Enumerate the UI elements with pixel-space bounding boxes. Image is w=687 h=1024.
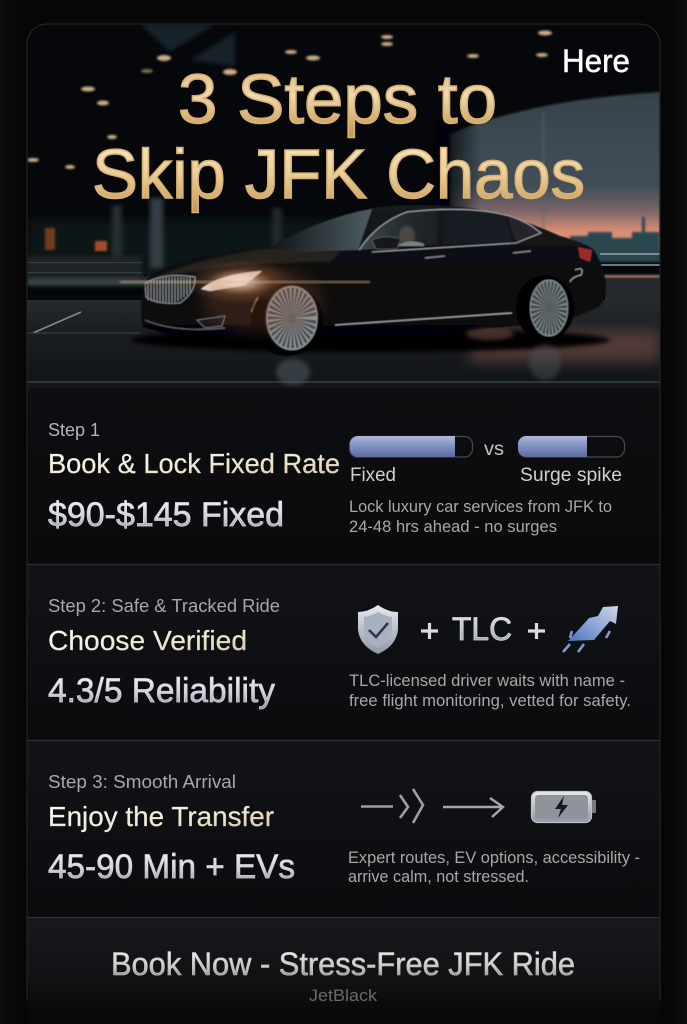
luxury black sedan bbox=[130, 205, 610, 356]
wheel: rear bbox=[516, 275, 574, 341]
icon: shield with check bbox=[358, 605, 398, 654]
bar comparison: fixed vs surge: Fixed bbox=[350, 465, 396, 486]
call to action text: Book Now - Stress-Free JFK Ride bbox=[111, 946, 575, 982]
step 2 description: TLC-licensed driver waits with name - bbox=[349, 671, 625, 690]
bar comparison: fixed vs surge: Surge spike bbox=[520, 465, 622, 486]
bar comparison: fixed vs surge bbox=[350, 436, 624, 486]
title bbox=[92, 60, 585, 213]
step 1 heading: Book & Lock Fixed Rate bbox=[48, 448, 340, 479]
panel: hero photo bbox=[27, 24, 660, 388]
panel: step 1 bbox=[28, 388, 660, 564]
step 1 description: 24-48 hrs ahead - no surges bbox=[349, 517, 557, 536]
panel: step 2 bbox=[28, 565, 660, 740]
step 1 description bbox=[349, 497, 612, 536]
headlight flare bbox=[120, 260, 370, 334]
step 3 description bbox=[348, 848, 640, 886]
step 2 rating: 4.3/5 Reliability bbox=[48, 672, 275, 710]
section dividers bbox=[27, 564, 660, 918]
step 2 description: free flight monitoring, vetted for safety. bbox=[349, 691, 631, 710]
step 3 time: 45-90 Min + EVs bbox=[48, 848, 295, 886]
step 1 price: $90-$145 Fixed bbox=[48, 496, 284, 534]
step 3 description: Expert routes, EV options, accessibility - bbox=[348, 848, 640, 867]
step 3 heading: Enjoy the Transfer bbox=[48, 801, 274, 832]
label: Here: Here bbox=[562, 43, 630, 79]
title: 3 Steps to bbox=[178, 60, 497, 138]
step 2 description bbox=[349, 671, 631, 710]
step 3 label: Step 3: Smooth Arrival bbox=[48, 772, 236, 792]
brand name: JetBlack bbox=[309, 986, 378, 1005]
wheel: front bbox=[251, 284, 323, 356]
bar comparison: fixed vs surge: vs bbox=[484, 439, 504, 460]
plus sign bbox=[528, 623, 545, 639]
step 3 description: arrive calm, not stressed. bbox=[348, 867, 529, 886]
background: night terminal bbox=[27, 24, 660, 388]
wheel reflections on wet floor bbox=[276, 328, 561, 385]
arrow: line with chevrons bbox=[361, 789, 423, 823]
panel: step 3 bbox=[28, 741, 660, 917]
arrow: long right arrow bbox=[443, 798, 503, 817]
TLC label: TLC bbox=[452, 611, 512, 647]
step 1 label: Step 1 bbox=[48, 420, 100, 440]
title: Skip JFK Chaos bbox=[92, 135, 585, 213]
panel: footer call to action bbox=[28, 918, 660, 1024]
icon: rocket seat bbox=[563, 606, 618, 652]
step 2 heading: Choose Verified bbox=[48, 625, 247, 656]
ceiling lights bbox=[27, 30, 552, 169]
plus sign bbox=[421, 623, 438, 639]
step 2 label: Step 2: Safe & Tracked Ride bbox=[48, 596, 280, 616]
icon: EV battery bbox=[532, 792, 596, 822]
step 1 description: Lock luxury car services from JFK to bbox=[349, 497, 612, 516]
